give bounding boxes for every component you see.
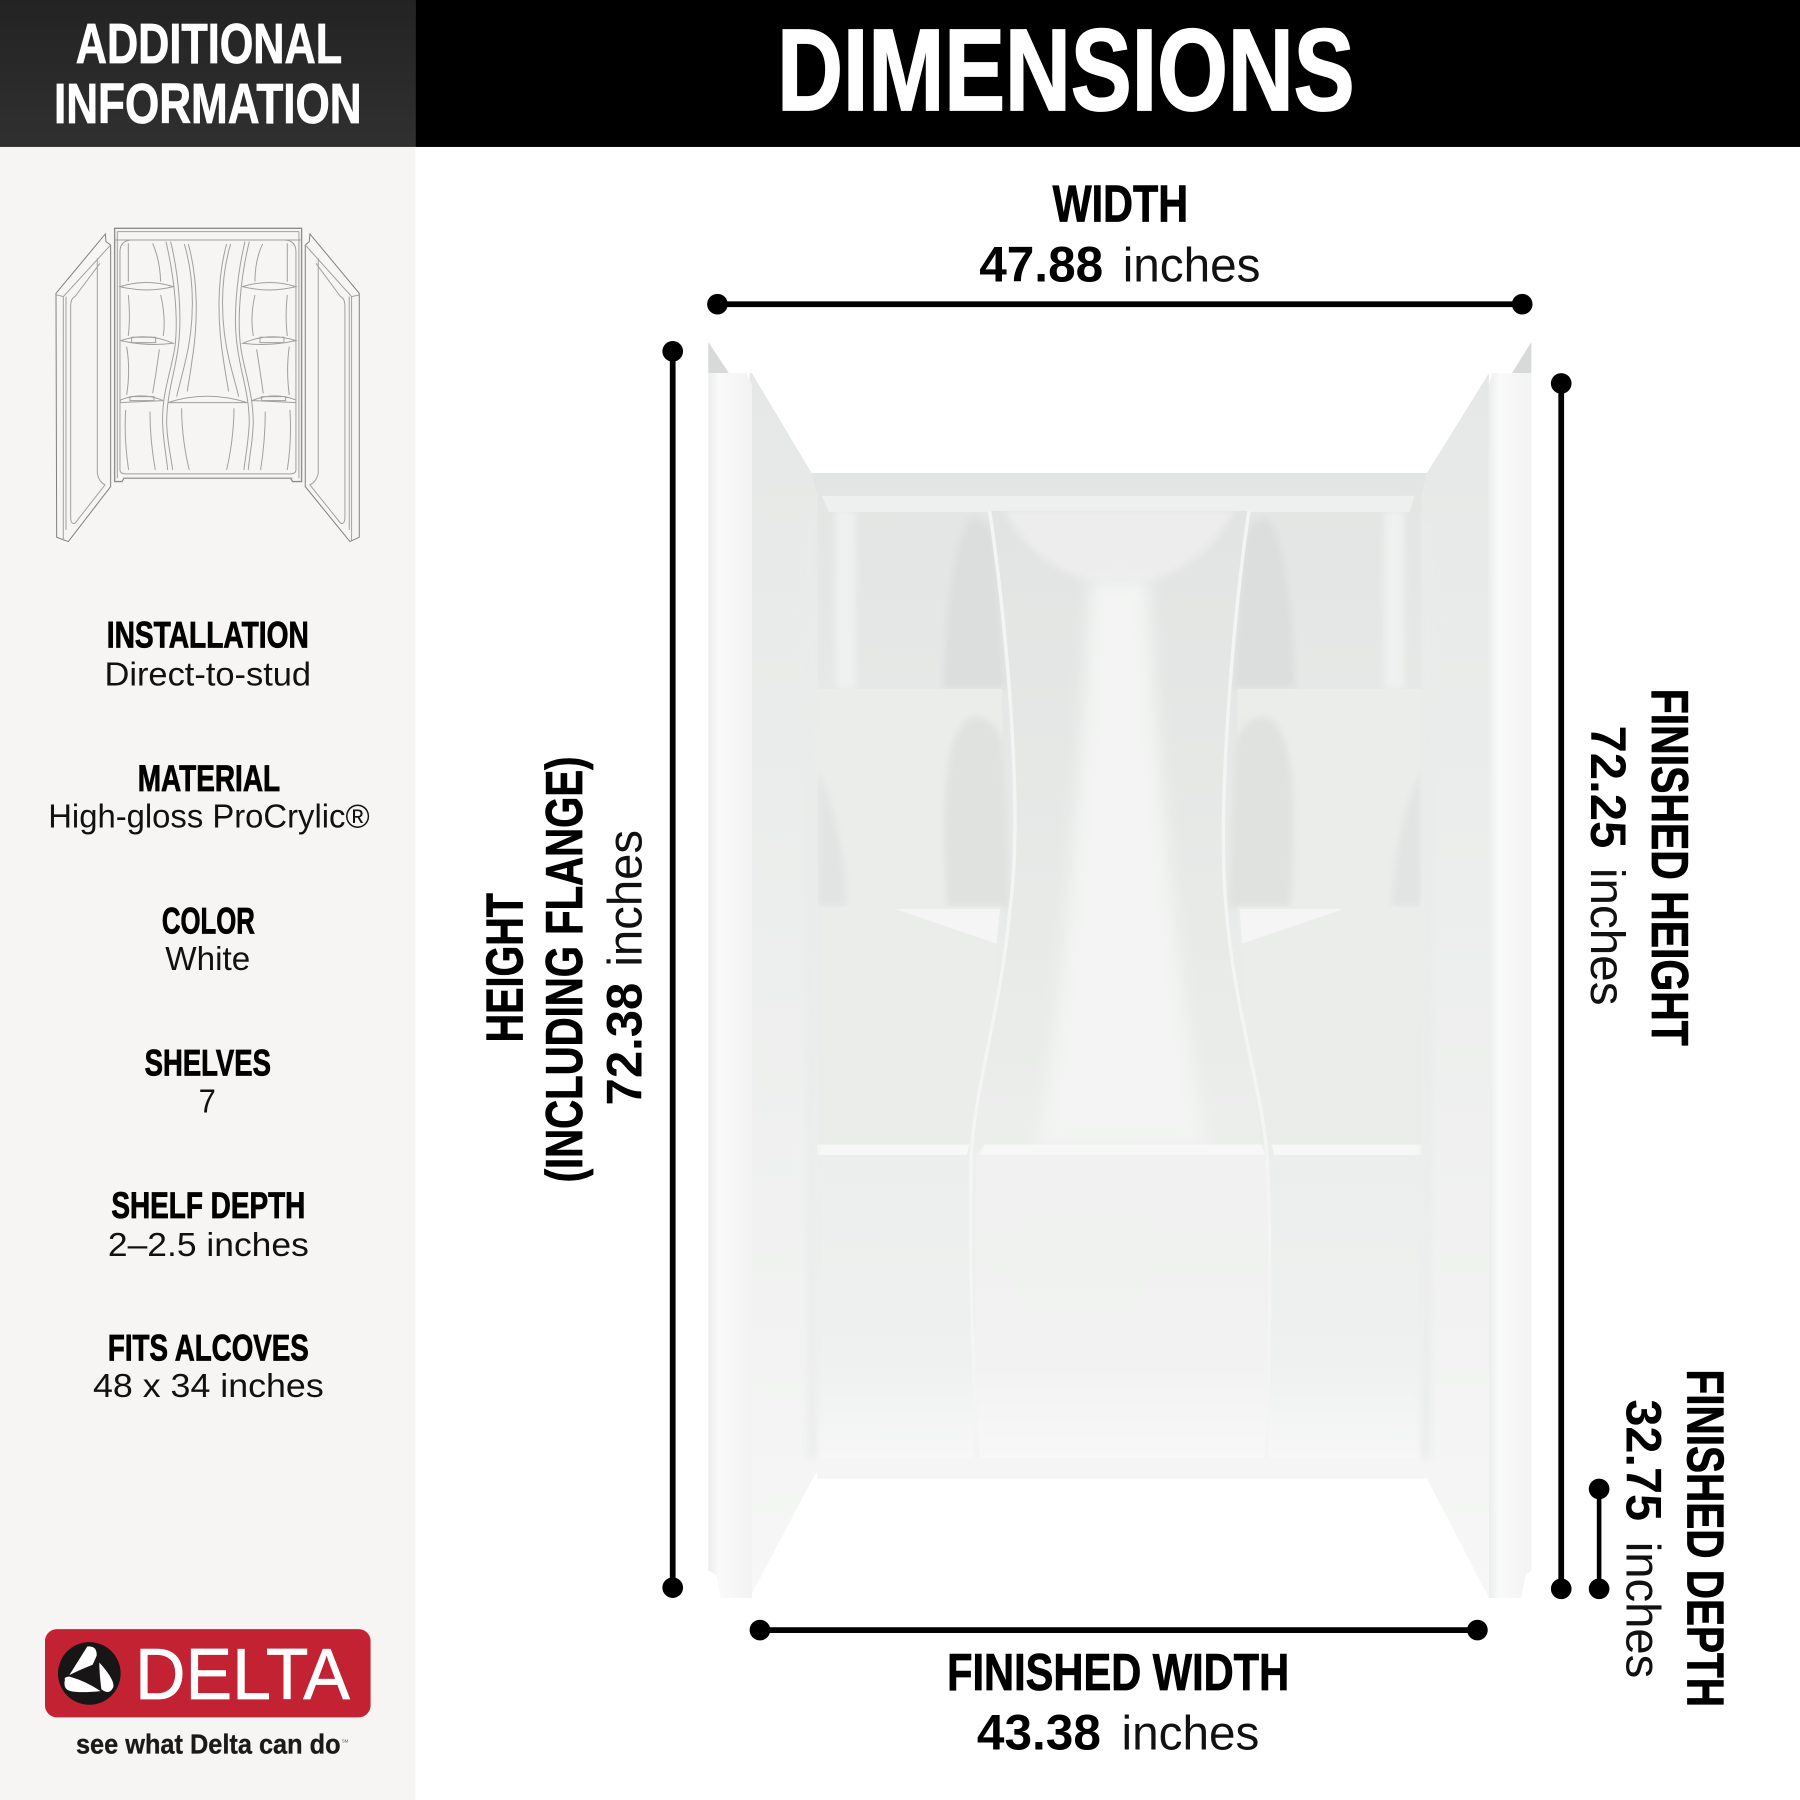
center column <box>975 511 1269 1458</box>
label: finished height: inches <box>1580 868 1634 1006</box>
left side wall <box>750 373 817 1598</box>
label: height including flange: HEIGHT <box>475 893 533 1042</box>
shelf lip highlights <box>815 1145 1423 1155</box>
label: finished width <box>947 1643 1289 1760</box>
spec: fits alcoves: 48 x 34 inches <box>93 1368 324 1405</box>
left flange tip <box>708 342 729 373</box>
delta logo: see what Delta can do <box>76 1729 341 1760</box>
left flange <box>708 373 752 1598</box>
label: width: inches <box>1123 238 1260 292</box>
bottom panels <box>812 1145 978 1458</box>
dimension line: finished depth <box>1589 1479 1609 1599</box>
center arch highlight <box>1004 511 1234 580</box>
header: dimensions title: DIMENSIONS <box>777 5 1355 135</box>
spec: installation <box>104 614 311 693</box>
label: width: 47.88 <box>979 235 1103 292</box>
label: finished depth <box>1616 1370 1734 1707</box>
label: finished height <box>1580 689 1699 1046</box>
dimension line: finished width <box>750 1620 1488 1640</box>
dimension line: finished height <box>1551 373 1572 1599</box>
right side wall <box>1421 373 1489 1598</box>
spec: shelves: 7 <box>199 1083 216 1120</box>
spec: material: MATERIAL <box>138 758 280 799</box>
label: finished depth: inches <box>1616 1542 1670 1678</box>
label: finished height: 72.25 <box>1580 726 1637 848</box>
delta logo <box>45 1629 371 1760</box>
right flange tip <box>1512 342 1531 373</box>
label: height including flange: (INCLUDING FLANGE) <box>535 757 593 1182</box>
spec: shelves: SHELVES <box>145 1043 271 1084</box>
rib lines <box>971 511 1015 1458</box>
dimension line: height including flange <box>662 341 683 1598</box>
right flange <box>1489 373 1531 1598</box>
label: width <box>979 175 1260 292</box>
label: finished depth: 32.75 <box>1616 1399 1673 1521</box>
icon: shower wall line drawing <box>56 228 359 542</box>
header: additional information: ADDITIONAL <box>76 12 342 75</box>
spec: material: High-gloss ProCrylic® <box>48 799 370 836</box>
spec: shelf depth: 2–2.5 inches <box>108 1227 309 1264</box>
upper compartment shading <box>836 511 1404 689</box>
shelf panel row one <box>812 689 1002 907</box>
delta logo: DELTA <box>135 1634 350 1715</box>
header: additional information <box>0 0 416 147</box>
spec: installation: Direct-to-stud <box>104 656 311 693</box>
spec: fits alcoves <box>93 1327 324 1405</box>
label: height including flange: 72.38 <box>596 983 653 1105</box>
spec: fits alcoves: FITS ALCOVES <box>108 1327 309 1368</box>
bottom center panel <box>976 1145 1267 1458</box>
label: finished height: FINISHED HEIGHT <box>1641 689 1699 1046</box>
shelf panel row two <box>812 907 1001 1145</box>
label: width: WIDTH <box>1053 175 1188 233</box>
spec: shelves <box>145 1043 271 1120</box>
sidebar background panel <box>0 147 416 1800</box>
label: finished depth: FINISHED DEPTH <box>1677 1370 1735 1707</box>
header: dimensions title <box>416 0 1800 147</box>
label: finished width: FINISHED WIDTH <box>947 1643 1289 1701</box>
spec: color <box>162 900 255 978</box>
back wall <box>812 473 1427 1479</box>
delta logo: SM <box>342 1738 349 1743</box>
spec: shelf depth <box>108 1185 309 1264</box>
label: finished width: 43.38 <box>977 1703 1101 1760</box>
spec: color: COLOR <box>162 900 255 941</box>
top ledge <box>812 473 1427 511</box>
label: height including flange: inches <box>599 830 653 967</box>
dimension line: width <box>707 294 1533 315</box>
bottom sill <box>817 1458 1422 1479</box>
spec: color: White <box>165 941 250 978</box>
center column highlight <box>1039 580 1205 1145</box>
label: finished width: inches <box>1122 1706 1259 1760</box>
spec: material <box>48 758 370 836</box>
side wall inner streaks <box>804 517 1435 1458</box>
shower surround product image <box>708 342 1531 1598</box>
spec: shelf depth: SHELF DEPTH <box>111 1185 305 1226</box>
header: additional information: INFORMATION <box>54 72 362 135</box>
spec: installation: INSTALLATION <box>107 614 309 655</box>
label: height including flange <box>475 757 653 1182</box>
